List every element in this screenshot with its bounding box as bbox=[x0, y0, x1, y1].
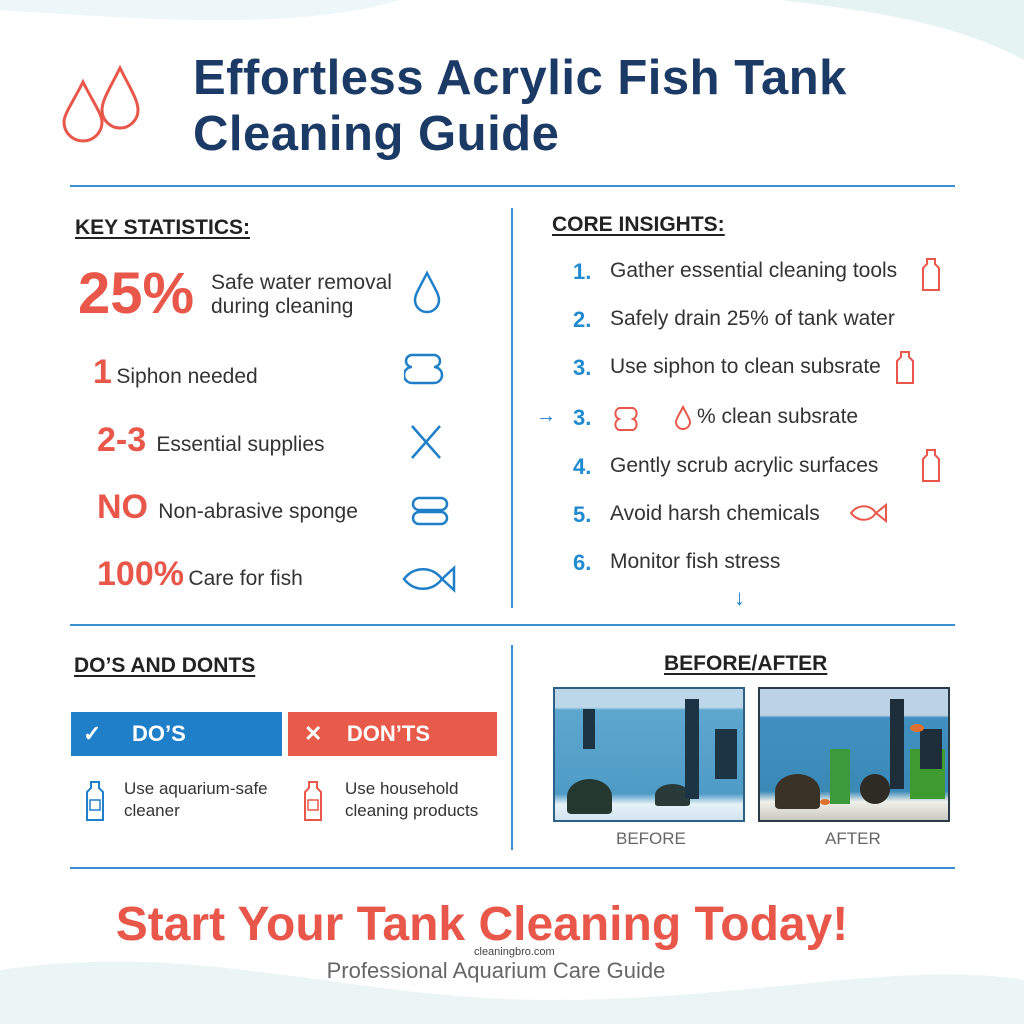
heading: CORE INSIGHTS: bbox=[552, 213, 725, 236]
title bbox=[193, 51, 847, 161]
icon: fish bbox=[402, 565, 456, 593]
stat 25% bbox=[78, 261, 392, 326]
list: → bbox=[536, 405, 556, 427]
list: Monitor fish stress bbox=[610, 550, 780, 573]
image before bbox=[553, 687, 745, 822]
do item bbox=[86, 779, 268, 821]
title: Effortless Acrylic Fish Tank bbox=[193, 51, 847, 105]
panel: core insights bbox=[536, 213, 940, 610]
list: 3. bbox=[573, 405, 591, 430]
call to action: Start Your Tank Cleaning Today! bbox=[116, 898, 848, 951]
list bbox=[536, 259, 897, 610]
do box: ✓ DO’S bbox=[83, 721, 186, 746]
list: 4. bbox=[573, 454, 591, 479]
panel: before after: AFTER bbox=[825, 829, 881, 848]
stat 25%: Safe water removal bbox=[211, 271, 392, 294]
icon: drop bbox=[414, 270, 440, 314]
heading: KEY STATISTICS: bbox=[75, 216, 250, 239]
do box bbox=[71, 712, 282, 756]
icons: bottles bbox=[922, 258, 940, 482]
stat 100%: 100% Care for fish bbox=[97, 555, 303, 593]
list: Gather essential cleaning tools bbox=[610, 259, 897, 282]
dont item: Use household bbox=[345, 779, 458, 798]
stat 2-3: 2-3 Essential supplies bbox=[97, 421, 325, 459]
icon: water drops bbox=[62, 64, 140, 142]
list: Avoid harsh chemicals bbox=[610, 502, 820, 525]
list: % clean subsrate bbox=[697, 405, 858, 428]
dont box: ✕ DON’TS bbox=[304, 721, 430, 746]
icon: sponge bbox=[404, 354, 444, 384]
list: 2. bbox=[573, 307, 591, 332]
dont box bbox=[288, 712, 497, 756]
icon: fish red bbox=[850, 503, 887, 523]
do item: cleaner bbox=[124, 801, 180, 820]
panel: dos and donts bbox=[71, 654, 497, 821]
panel: before after: BEFORE/AFTER bbox=[664, 652, 827, 675]
list: Safely drain 25% of tank water bbox=[610, 307, 895, 330]
stat 25%: 25% bbox=[78, 261, 194, 326]
stat 25%: during cleaning bbox=[211, 295, 353, 318]
list: 6. bbox=[573, 550, 591, 575]
stat 1: 1 Siphon needed bbox=[93, 353, 258, 391]
list: 1. bbox=[573, 259, 591, 284]
dont item bbox=[304, 779, 478, 821]
text: cleaningbro.com bbox=[474, 946, 555, 958]
image after bbox=[758, 687, 950, 822]
subtitle: Professional Aquarium Care Guide bbox=[327, 958, 665, 983]
list: 5. bbox=[573, 502, 591, 527]
panel: before after: BEFORE bbox=[616, 829, 686, 848]
icon: tools bbox=[411, 425, 441, 459]
list: Gently scrub acrylic surfaces bbox=[610, 454, 878, 477]
heading: DO’S AND DONTS bbox=[74, 654, 255, 677]
panel: key statistics bbox=[75, 216, 456, 593]
do item: Use aquarium-safe bbox=[124, 779, 268, 798]
list: 3. bbox=[573, 355, 591, 380]
dont item: cleaning products bbox=[345, 801, 478, 820]
panel: before after bbox=[553, 652, 950, 848]
list: ↓ bbox=[734, 585, 745, 610]
list: Use siphon to clean subsrate bbox=[610, 355, 881, 378]
title: Cleaning Guide bbox=[193, 107, 559, 161]
stat NO: NO Non-abrasive sponge bbox=[97, 488, 358, 526]
icon: sponge stack bbox=[412, 496, 448, 526]
